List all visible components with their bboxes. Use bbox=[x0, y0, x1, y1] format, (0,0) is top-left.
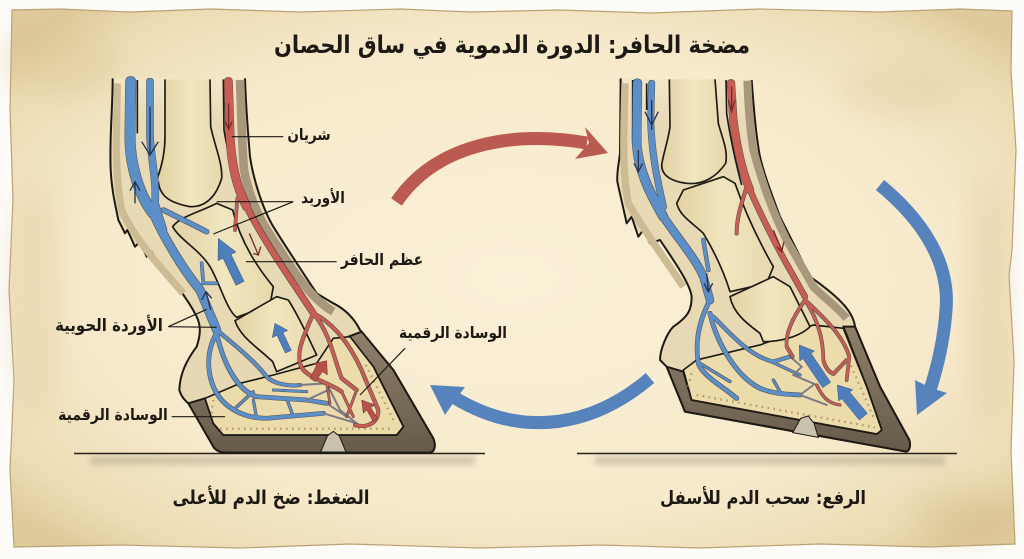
capillaries bbox=[790, 357, 827, 405]
heel tan shading bbox=[624, 83, 683, 287]
leader: artery bbox=[232, 135, 283, 138]
curved arrow: blue right bbox=[880, 185, 947, 415]
cushion speckles bbox=[212, 363, 393, 429]
label: veins: الأوريد bbox=[301, 188, 345, 207]
skin shading band bbox=[240, 80, 333, 312]
digital cushion bbox=[683, 325, 882, 434]
flow arrows on bones bbox=[218, 238, 291, 353]
title: مضخة الحافر: الدورة الدموية في ساق الحصان bbox=[274, 32, 750, 59]
frog bbox=[793, 416, 818, 437]
long pastern bone bbox=[677, 177, 773, 292]
tendon lines bbox=[633, 79, 742, 185]
short pastern bone bbox=[730, 277, 810, 342]
flow arrows bbox=[799, 345, 867, 420]
caption: compression: الضغط: ضخ الدم للأعلى bbox=[172, 486, 370, 509]
vein and artery direction arrows bbox=[130, 103, 261, 310]
label: artery: شريان bbox=[287, 127, 331, 144]
frog bbox=[321, 431, 346, 452]
leader: veins bbox=[213, 202, 293, 234]
label: digital cushion left: الوسادة الرقمية bbox=[58, 405, 168, 424]
curved arrow: blue bottom bbox=[430, 378, 650, 423]
capillaries bbox=[300, 383, 357, 423]
hoof wall bbox=[667, 327, 910, 452]
leader: coffin bone bbox=[246, 260, 337, 263]
ground line: right bbox=[577, 454, 957, 465]
hoof wall bbox=[188, 332, 435, 453]
leader: digital cushion right bbox=[360, 348, 405, 395]
label: vital veins: الأوردة الحويية bbox=[55, 315, 163, 335]
label: digital cushion right: الوسادة الرقمية bbox=[399, 323, 507, 342]
veins bbox=[130, 82, 327, 418]
vein and artery direction arrows bbox=[634, 87, 784, 292]
leader: vital veins bbox=[168, 309, 217, 327]
curved arrow: red top bbox=[396, 127, 608, 202]
skin shading band bbox=[747, 81, 847, 318]
veins bbox=[637, 83, 800, 398]
artery bbox=[731, 83, 849, 405]
leg skin bbox=[617, 78, 910, 452]
leader: digital cushion left bbox=[172, 415, 225, 418]
cannon bone bbox=[662, 79, 726, 184]
label: coffin bone: عظم الحافر bbox=[340, 250, 423, 269]
ground line: left bbox=[74, 454, 485, 465]
long pastern bone bbox=[173, 203, 273, 317]
caption: lift: الرفع: سحب الدم للأسفل bbox=[660, 486, 866, 509]
short pastern bone bbox=[235, 297, 317, 372]
cannon bone bbox=[158, 79, 222, 207]
hoof diagram: lift (right) bbox=[617, 78, 910, 452]
hoof diagram: compression (left) bbox=[110, 78, 435, 453]
cushion speckles bbox=[688, 363, 875, 427]
digital cushion bbox=[205, 337, 403, 435]
flow arrows in cushion bbox=[310, 361, 377, 422]
artery bbox=[228, 82, 378, 426]
leg skin bbox=[110, 78, 435, 453]
tendon lines bbox=[137, 79, 243, 207]
heel tan shading bbox=[116, 83, 183, 293]
